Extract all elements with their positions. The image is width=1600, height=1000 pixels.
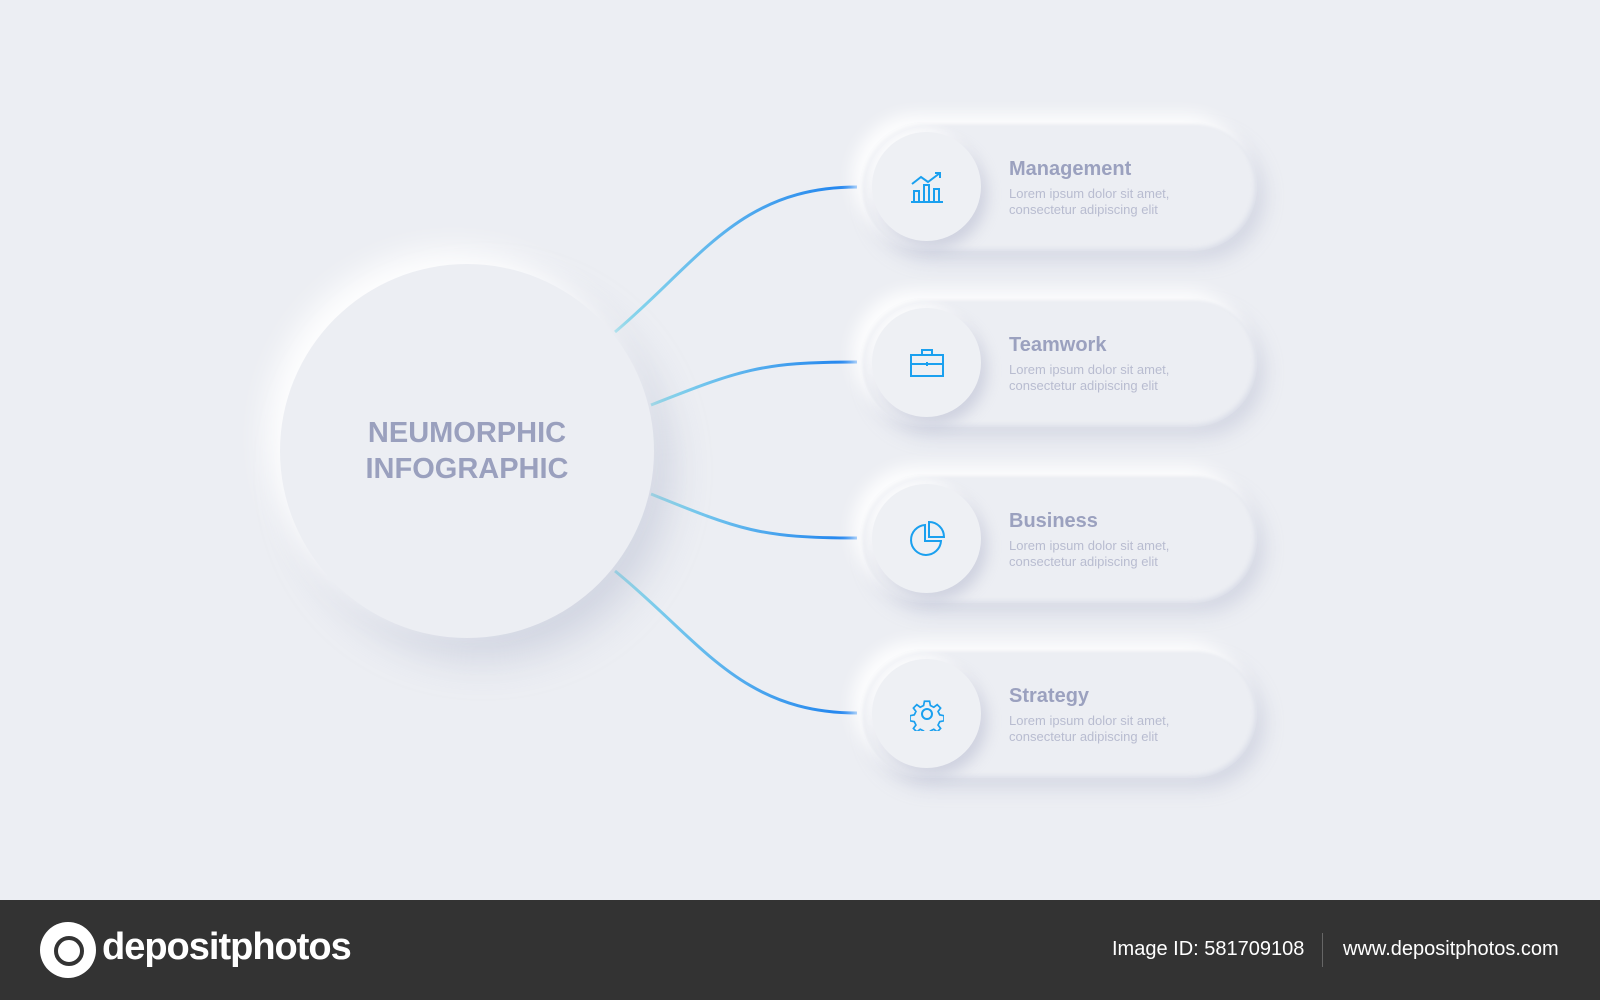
icon: pie chart [872,484,981,593]
website: www.depositphotos.com [1343,938,1559,960]
card: Business: Business [1009,510,1098,532]
logo text: depositphotos [102,926,351,968]
card: Teamwork: Teamwork [1009,334,1106,356]
image id: Image ID: 581709108 [1112,938,1304,960]
footer bar [0,900,1600,1000]
card: Teamwork: Lorem ipsum dolor sit amet, [1009,362,1169,377]
card: Teamwork: consectetur adipiscing elit [1009,378,1158,392]
card: Management: Lorem ipsum dolor sit amet, [1009,186,1169,201]
center title [366,417,568,485]
card: Management [860,122,1257,251]
card: Management: Management [1009,158,1131,180]
card: Strategy: consectetur adipiscing elit [1009,728,1158,744]
card: Strategy: Strategy [1009,685,1089,707]
central circle [280,264,654,638]
card: Management: consectetur adipiscing elit [1009,202,1158,216]
center title: INFOGRAPHIC [366,453,568,485]
card: Business: consectetur adipiscing elit [1009,554,1158,568]
icon: briefcase [872,308,981,417]
card: Business: Lorem ipsum dolor sit amet, [1009,538,1169,553]
icon: gear [872,659,981,768]
card: Strategy [860,649,1257,778]
icon: chart [872,132,981,241]
card: Business [860,474,1257,603]
center title: NEUMORPHIC [368,417,566,449]
card: Strategy: Lorem ipsum dolor sit amet, [1009,713,1169,728]
logo icon [40,922,96,978]
card: Teamwork [860,298,1257,427]
